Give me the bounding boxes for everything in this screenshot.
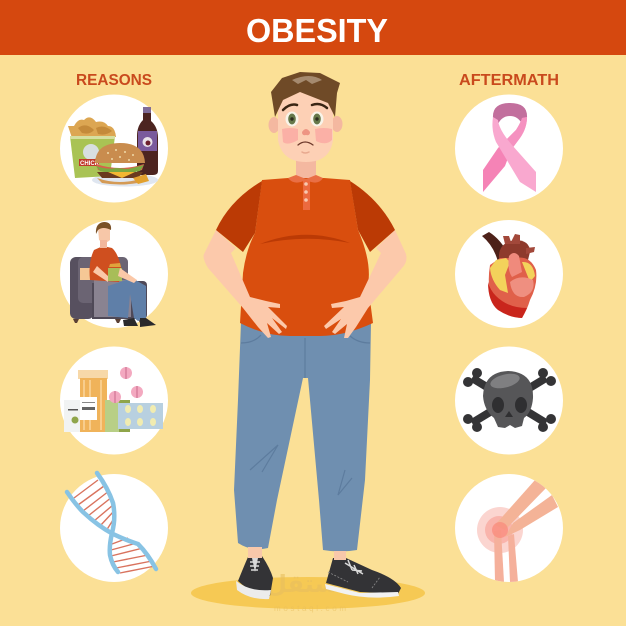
icon: skull and crossbones [455, 346, 563, 454]
watermark [266, 571, 354, 613]
icon: fast food [60, 94, 168, 202]
collar and placket [303, 180, 310, 210]
ankles [248, 547, 346, 560]
icon: fast food: CHICK [80, 161, 100, 167]
trousers [234, 322, 371, 552]
neck [296, 158, 316, 180]
shoes [236, 556, 401, 599]
title: OBESITY [246, 12, 388, 49]
right arm and hand [324, 230, 406, 338]
ground shadow [191, 577, 425, 609]
watermark: mostaql.com [274, 604, 346, 613]
icon: inflamed knee [455, 474, 563, 582]
man figure [204, 72, 406, 599]
shirt body [240, 178, 373, 336]
icon: dna [60, 473, 168, 582]
icon: medicine [60, 346, 168, 454]
heading: aftermath: AFTERMATH [459, 72, 559, 89]
header banner [0, 0, 626, 55]
sleeves [216, 181, 262, 252]
icon: man on sofa [60, 220, 168, 328]
icon: pink ribbon [455, 94, 563, 202]
heading: reasons: REASONS [76, 72, 152, 89]
icon: heart [455, 220, 563, 328]
head [268, 72, 342, 162]
left arm and hand [204, 230, 287, 338]
watermark: مستقل [266, 571, 354, 598]
